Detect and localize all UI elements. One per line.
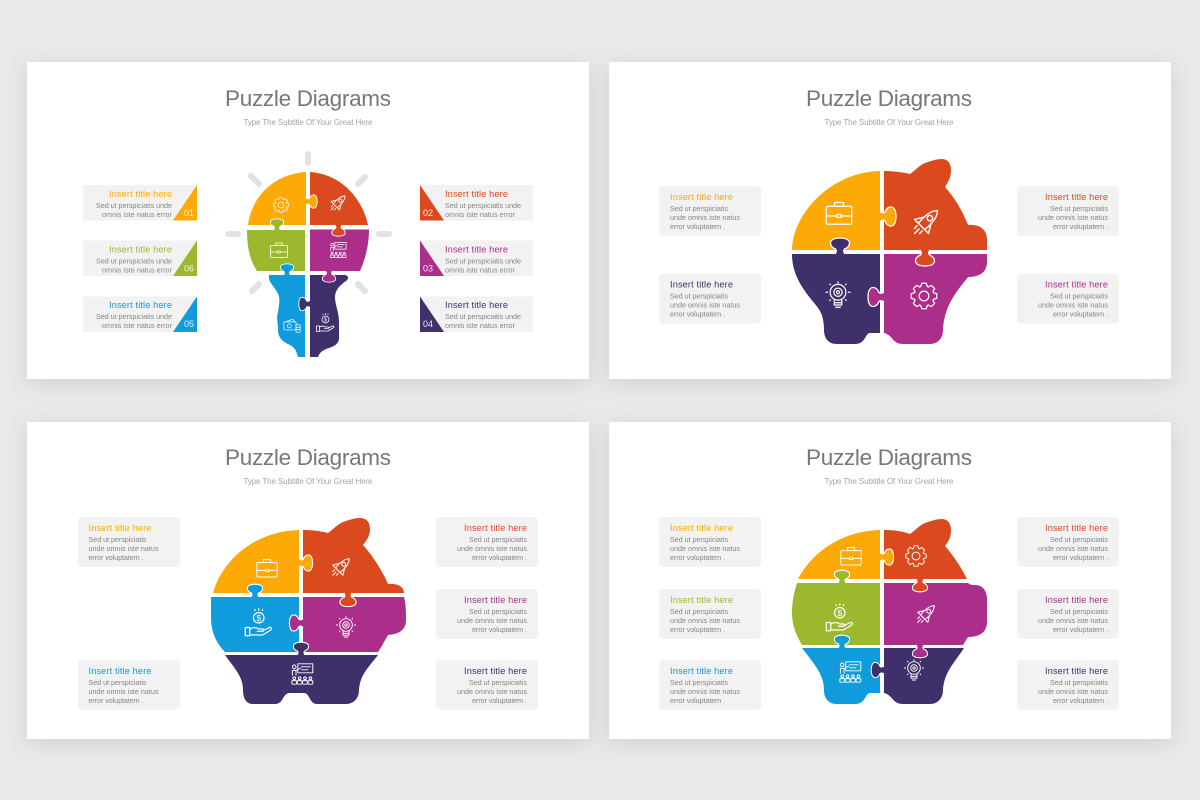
card right top — [1017, 517, 1119, 567]
card left top: error voluptatem . — [88, 553, 144, 562]
card right bottom: unde omnis iste natus — [1038, 300, 1108, 310]
card 01: Insert title here — [109, 189, 172, 199]
card 02: Sed ut perspiciatis unde — [445, 201, 521, 210]
card 02: 02 — [423, 208, 433, 218]
card 04: 04 — [423, 319, 433, 329]
card left top — [659, 186, 761, 236]
panel: light bulb puzzle slide — [27, 62, 589, 379]
card left bottom: unde omnis iste natus — [88, 687, 159, 696]
card 01: 01 — [184, 208, 194, 218]
subtitle: Type The Subtitle Of Your Great Here — [244, 477, 373, 486]
card right bottom: error voluptatem . — [1053, 696, 1108, 705]
title: Puzzle Diagrams — [806, 445, 972, 470]
card right bottom: Insert title here — [464, 666, 527, 676]
card right bottom: Insert title here — [1045, 666, 1108, 676]
card right middle: Sed ut perspiciatis — [1050, 607, 1108, 616]
card left bottom: unde omnis iste natus — [670, 300, 740, 310]
card right middle — [1017, 589, 1119, 639]
card right middle: unde omnis iste natus — [1038, 616, 1108, 625]
card left bottom — [659, 274, 761, 324]
card 03 — [420, 240, 533, 276]
subtitle: Type The Subtitle Of Your Great Here — [824, 477, 954, 486]
card right bottom: Sed ut perspiciatis — [469, 678, 527, 687]
card 03: Insert title here — [445, 244, 508, 254]
card left bottom: Sed ut perspiciatis — [670, 292, 728, 300]
card left top: Sed ut perspiciatis — [670, 204, 728, 213]
card right middle: unde omnis iste natus — [457, 616, 527, 625]
card 02 — [420, 185, 533, 220]
card right bottom: error voluptatem . — [1053, 310, 1108, 318]
card right bottom: Insert title here — [1045, 280, 1108, 290]
card 06: Insert title here — [109, 244, 172, 254]
card 06: 06 — [184, 264, 194, 274]
card right top: Insert title here — [1045, 523, 1108, 533]
card left top: error voluptatem . — [670, 222, 725, 231]
card left top: error voluptatem . — [670, 553, 725, 562]
card left bottom: error voluptatem . — [670, 310, 725, 318]
card left bottom: error voluptatem . — [88, 696, 144, 705]
card 05: Insert title here — [109, 300, 172, 310]
card left bottom: error voluptatem . — [670, 696, 725, 705]
card 04 — [420, 296, 533, 332]
card 03: omnis iste natus error — [445, 266, 516, 274]
card 03: Sed ut perspiciatis unde — [445, 256, 521, 266]
piggy puzzle, five pieces — [211, 518, 406, 704]
card left bottom: Sed ut perspiciatis — [88, 678, 147, 687]
title: Puzzle Diagrams — [225, 86, 391, 111]
card 04: omnis iste natus error — [445, 321, 516, 330]
card 06: Sed ut perspiciatis unde — [96, 256, 172, 266]
card 05: 05 — [184, 319, 194, 329]
card right top — [436, 517, 538, 567]
card 03: 03 — [423, 264, 433, 274]
card right top: Sed ut perspiciatis — [469, 535, 527, 544]
card right bottom — [1017, 660, 1119, 710]
card right top: error voluptatem . — [1053, 553, 1108, 562]
title: Puzzle Diagrams — [225, 445, 391, 470]
card left bottom: Insert title here — [670, 666, 733, 676]
card right bottom: error voluptatem . — [472, 696, 527, 705]
card left middle: Insert title here — [670, 595, 733, 605]
card left middle: unde omnis iste natus — [670, 616, 740, 625]
card left bottom — [659, 660, 761, 710]
card left top: Insert title here — [670, 192, 733, 202]
card left top: Insert title here — [88, 523, 152, 533]
card 04: Insert title here — [445, 300, 508, 310]
card right top: Sed ut perspiciatis — [1050, 535, 1108, 544]
card left bottom — [78, 660, 180, 710]
card left middle: Sed ut perspiciatis — [670, 607, 728, 616]
card left middle — [659, 589, 761, 639]
card right bottom — [436, 660, 538, 710]
card right top: Insert title here — [1045, 192, 1108, 202]
card left top: Insert title here — [670, 523, 733, 533]
piggy puzzle, four pieces — [792, 159, 987, 344]
card right top: Sed ut perspiciatis — [1050, 204, 1108, 213]
title: Puzzle Diagrams — [806, 86, 972, 111]
card left top: Sed ut perspiciatis — [670, 535, 728, 544]
card left top — [78, 517, 180, 567]
card right middle: error voluptatem . — [472, 625, 527, 634]
card left bottom: Insert title here — [670, 280, 733, 290]
card 01: Sed ut perspiciatis unde — [96, 201, 172, 210]
card 02: omnis iste natus error — [445, 210, 516, 219]
card right bottom: unde omnis iste natus — [457, 687, 527, 696]
piggy puzzle, six pieces — [792, 519, 987, 704]
card 01 — [83, 185, 197, 220]
card left bottom: unde omnis iste natus — [670, 687, 740, 696]
card 01: omnis iste natus error — [102, 210, 173, 219]
light rays — [228, 154, 389, 291]
card right bottom: Sed ut perspiciatis — [1050, 292, 1108, 300]
card right top: unde omnis iste natus — [1038, 213, 1108, 222]
card right top: Insert title here — [464, 523, 527, 533]
card right bottom — [1017, 274, 1119, 324]
panel: piggy bank six pieces slide — [609, 422, 1171, 739]
light bulb puzzle — [247, 172, 369, 357]
card 02: Insert title here — [445, 189, 508, 199]
card right top: error voluptatem . — [472, 553, 527, 562]
card left top: Sed ut perspiciatis — [88, 535, 147, 544]
card right middle: error voluptatem . — [1053, 625, 1108, 634]
card 05: Sed ut perspiciatis unde — [96, 312, 172, 321]
card 06: omnis iste natus error — [102, 266, 173, 274]
panel: piggy bank five pieces slide — [27, 422, 589, 739]
card right middle: Insert title here — [464, 595, 527, 605]
card right middle: Insert title here — [1045, 595, 1108, 605]
subtitle: Type The Subtitle Of Your Great Here — [824, 118, 954, 127]
card left bottom: Sed ut perspiciatis — [670, 678, 728, 687]
panel: piggy bank four pieces slide — [609, 62, 1171, 379]
card left middle: error voluptatem . — [670, 625, 725, 634]
card 04: Sed ut perspiciatis unde — [445, 312, 521, 321]
card right top: error voluptatem . — [1053, 222, 1108, 231]
card right bottom: Sed ut perspiciatis — [1050, 678, 1108, 687]
card right top — [1017, 186, 1119, 236]
card left bottom: Insert title here — [88, 666, 152, 676]
card left top — [659, 517, 761, 567]
subtitle: Type The Subtitle Of Your Great Here — [244, 118, 373, 127]
card right middle — [436, 589, 538, 639]
card right bottom: unde omnis iste natus — [1038, 687, 1108, 696]
card right middle: Sed ut perspiciatis — [469, 607, 527, 616]
card left top: unde omnis iste natus — [670, 213, 740, 222]
card 05 — [83, 296, 197, 332]
card 06 — [83, 240, 197, 276]
card right top: unde omnis iste natus — [1038, 544, 1108, 553]
card 05: omnis iste natus error — [102, 321, 173, 330]
card left top: unde omnis iste natus — [88, 544, 159, 553]
card left top: unde omnis iste natus — [670, 544, 740, 553]
card right top: unde omnis iste natus — [457, 544, 527, 553]
